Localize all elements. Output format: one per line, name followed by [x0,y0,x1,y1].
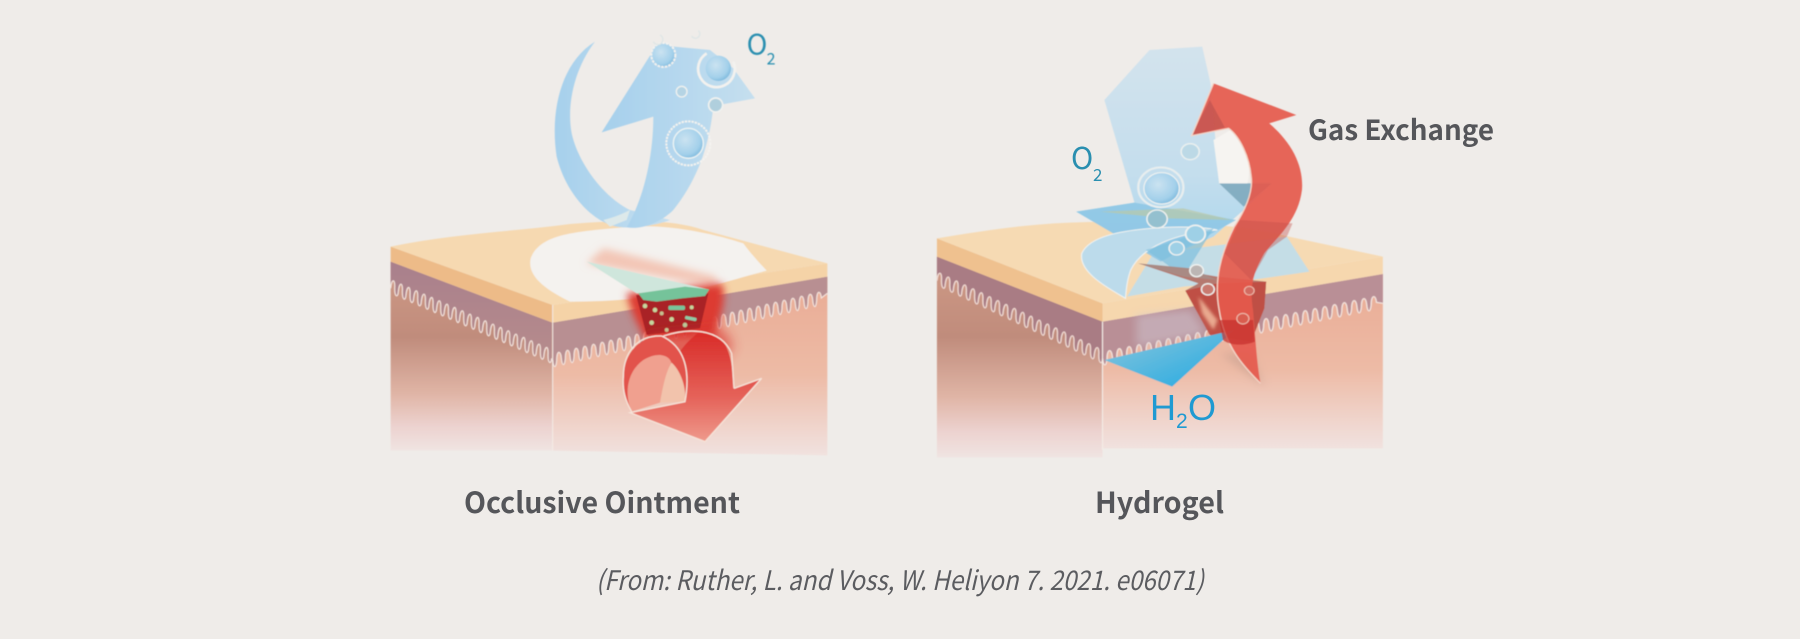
bubble: top right [698,53,735,87]
label: O2 above arrow: 2 [767,45,776,69]
arrow: blue oxygen arrow with bubbles [555,31,755,228]
white ointment layer [530,226,767,302]
label: O2 beside hydrogel [1071,134,1102,186]
label: H2O: O [1188,387,1216,428]
heading: Occlusive Ointment: Occlusive Ointment [464,480,740,522]
label: Gas Exchange: Gas Exchange [1308,109,1494,149]
panel: occlusive ointment illustration [391,23,827,455]
label: H2O: 2 [1176,410,1188,433]
skin block [937,222,1383,457]
panel: hydrogel illustration [937,47,1383,457]
wound with tissue [1136,263,1266,347]
arrow: blue water arrow downward [1104,330,1234,387]
arrow: red gas exchange arrow [1192,83,1302,387]
label: O2 beside hydrogel: O [1071,134,1093,178]
bubble: large [666,121,710,165]
wound [587,248,724,340]
label: O2 above arrow: O [747,23,767,63]
label: O2 beside hydrogel: 2 [1093,161,1102,186]
bubble: top left [651,43,675,67]
arrow: red curled exudate arrow [623,328,762,442]
hydrogel blue layers [1076,47,1309,298]
citation: (From: Ruther, L. and Voss, W. Heliyon 7. 2021. e06071) [596,559,1206,598]
label: H2O [1150,387,1216,433]
skin block [391,221,827,455]
bubbles [1138,144,1254,324]
label: H2O: H [1150,387,1176,428]
label: O2 above arrow [747,23,776,69]
heading: Hydrogel: Hydrogel [1095,480,1224,522]
